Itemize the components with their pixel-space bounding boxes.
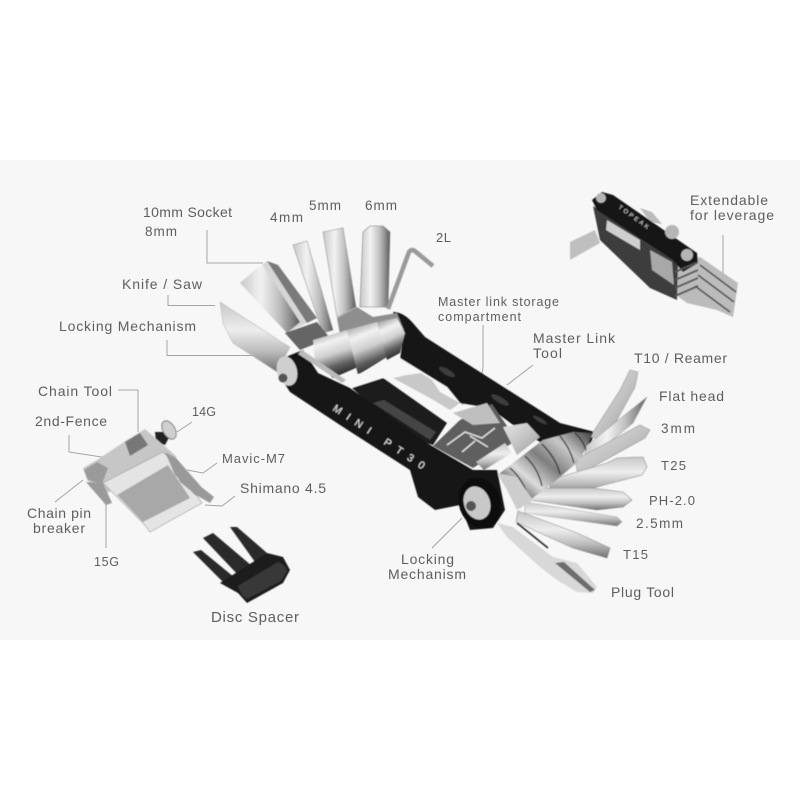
t-shaped markings xyxy=(447,428,495,452)
inset brand: TOPEAK xyxy=(617,205,649,231)
labels: 14G xyxy=(192,405,216,419)
hex key 2L xyxy=(388,250,433,309)
right pivot bolt xyxy=(451,471,509,535)
labels: Locking Mechanism xyxy=(59,318,196,334)
chain tool prongs xyxy=(165,452,214,503)
fan: 3mm xyxy=(575,425,650,475)
inset black plate xyxy=(592,192,698,272)
labels: T15 xyxy=(623,547,648,562)
disc spacer xyxy=(193,527,290,603)
fan: T10 reamer xyxy=(590,370,638,440)
labels: 2.5mm xyxy=(636,516,683,531)
labels: Master Link xyxy=(533,330,616,346)
labels: 2nd-Fence xyxy=(35,413,107,429)
labels: Locking xyxy=(401,551,454,567)
hex key 4mm xyxy=(293,241,333,333)
silver block xyxy=(453,403,500,425)
lever mechanism xyxy=(433,404,517,468)
inset silver fins xyxy=(673,257,738,317)
arm engraving: MINI PT30: MINI PT30 xyxy=(330,402,427,472)
fan: PH-2.0 xyxy=(530,488,632,510)
labels: for leverage xyxy=(690,207,774,223)
labels: compartment xyxy=(438,310,522,324)
spring xyxy=(476,443,512,470)
spacer top xyxy=(238,562,287,599)
inset fin lines xyxy=(695,265,736,312)
labels: 5mm xyxy=(309,198,341,213)
left pivot bolt xyxy=(273,354,301,388)
labels: Master link storage xyxy=(438,295,559,309)
chain tool plate xyxy=(103,452,202,532)
inset lower body xyxy=(593,206,678,300)
labels: T10 / Reamer xyxy=(634,350,727,366)
labels: Extendable xyxy=(690,192,768,208)
labels: Plug Tool xyxy=(611,584,674,600)
socket 10mm xyxy=(240,261,317,333)
interior black panel xyxy=(352,378,447,445)
ribbed roller barrel xyxy=(500,432,593,508)
hex key 5mm xyxy=(323,228,356,317)
labels: Flat head xyxy=(659,388,724,404)
labels: 8mm xyxy=(145,224,177,239)
leader lines xyxy=(55,230,723,548)
labels: breaker xyxy=(33,520,85,536)
fan: plug tool xyxy=(497,523,597,593)
labels: 10mm Socket xyxy=(143,204,232,220)
chain tool pin block xyxy=(125,433,148,456)
labels: T25 xyxy=(661,458,686,473)
upper arm xyxy=(393,312,595,445)
spacer prongs xyxy=(193,527,267,593)
inset hex xyxy=(570,230,600,260)
labels: 6mm xyxy=(365,198,397,213)
inset bolts xyxy=(596,193,693,261)
chain tool front xyxy=(86,482,112,505)
interior light opening xyxy=(343,358,460,408)
spacer back xyxy=(220,553,290,603)
fan: 2.5mm xyxy=(525,502,622,526)
main multi-tool illustration xyxy=(220,226,650,593)
knife blade xyxy=(220,302,290,372)
inset ribs xyxy=(675,262,698,296)
labels: Disc Spacer xyxy=(211,609,299,626)
extendable tool inset xyxy=(570,192,738,317)
inner panel recess xyxy=(373,400,436,440)
labels: Tool xyxy=(533,345,562,361)
labels: Knife / Saw xyxy=(122,276,203,292)
labels: Shimano 4.5 xyxy=(240,480,326,496)
inset knife xyxy=(640,208,662,224)
labels: Mavic-M7 xyxy=(222,451,285,466)
fan: T15 xyxy=(516,511,610,558)
thin silver strip xyxy=(298,350,346,383)
labels: 3mm xyxy=(661,421,695,436)
chain tool top bar xyxy=(83,429,177,493)
labels xyxy=(27,192,774,626)
spring roller xyxy=(503,423,540,455)
lower arm xyxy=(277,350,505,530)
barrel xyxy=(285,307,405,378)
chain tool xyxy=(83,418,214,532)
fan: flat head xyxy=(585,397,647,462)
labels: 2L xyxy=(436,230,451,245)
hex key 6mm xyxy=(360,226,390,307)
labels: 15G xyxy=(94,555,119,569)
inset silver pieces xyxy=(650,250,674,285)
chain tool knob xyxy=(155,418,179,445)
fence block xyxy=(84,462,108,484)
lower silver collar xyxy=(497,473,533,510)
labels: Chain Tool xyxy=(38,383,112,399)
upper arm highlights xyxy=(438,365,548,426)
chain tool silver bar xyxy=(393,373,460,410)
labels: PH-2.0 xyxy=(649,493,695,508)
fan: T25 xyxy=(550,457,647,495)
chain tool textured face xyxy=(117,465,190,522)
labels: Chain pin xyxy=(27,505,91,521)
labels: 4mm xyxy=(270,210,303,225)
labels: Mechanism xyxy=(388,566,466,582)
background band xyxy=(0,160,800,640)
inset light tools xyxy=(606,220,640,250)
